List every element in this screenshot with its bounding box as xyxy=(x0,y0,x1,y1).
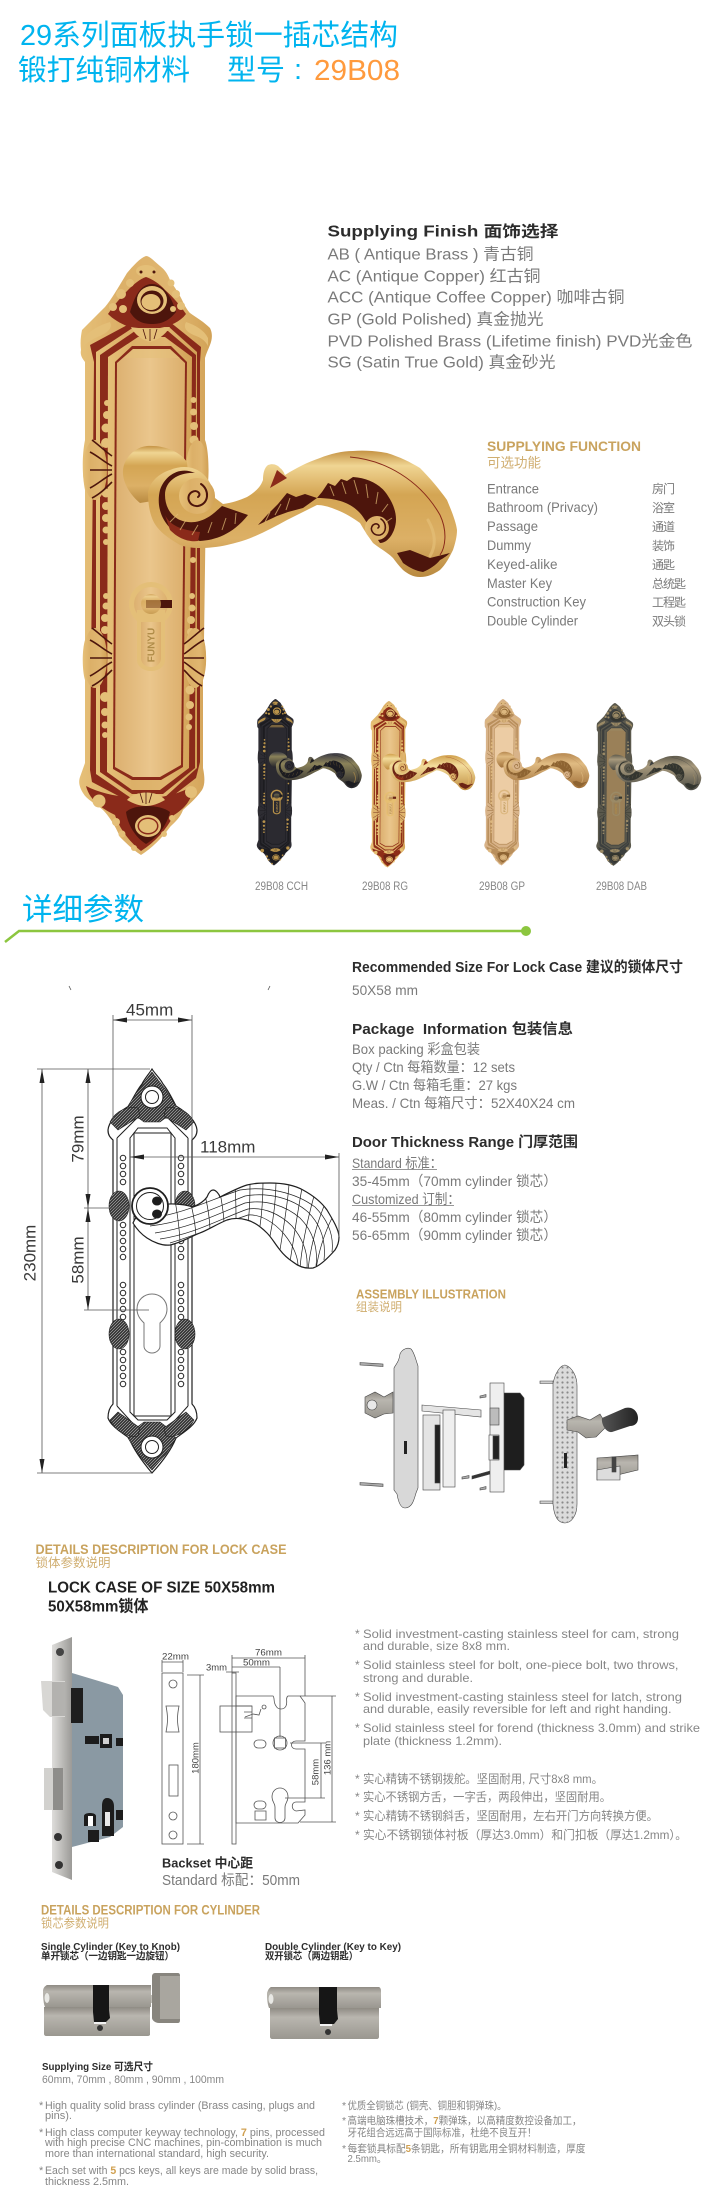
panel: door thickness range: Customized 订制： xyxy=(352,1191,460,1207)
lock drawing dimension labels: 76mm xyxy=(255,1648,282,1658)
panel: supplying finish: AB ( Antique Brass ) 青古铜 xyxy=(328,246,534,264)
panel: supplying function: 装饰 xyxy=(652,539,675,553)
panel: door thickness range: Door Thickness Range 门厚范围 xyxy=(352,1133,578,1151)
bead chains xyxy=(123,1158,181,1385)
lock case bullets chinese: 实心不锈钢方舌，一字舌，两段伸出，坚固耐用。 xyxy=(363,1789,611,1804)
right lever xyxy=(567,1408,638,1438)
main door handle photo xyxy=(79,256,457,855)
title: 29系列面板执手锁一插芯结构 xyxy=(20,19,398,52)
lock case bullets chinese: * xyxy=(355,1809,360,1823)
lock case bullets chinese xyxy=(355,1771,687,1842)
lock case bullets chinese: 实心精铸不锈钢拨舵。坚固耐用, 尺寸8x8 mm。 xyxy=(363,1771,603,1786)
lock drawing dimension labels: 136 mm xyxy=(322,1741,334,1775)
lock drawing dimension labels: 58mm xyxy=(310,1759,322,1785)
panel: recommended size: 50X58 mm xyxy=(352,982,418,998)
heading: cylinder details: DETAILS DESCRIPTION FOR CYLINDER xyxy=(41,1902,260,1918)
single cylinder caption xyxy=(41,1941,180,1962)
right plate xyxy=(540,1365,577,1523)
lock drawing dimension labels: 50mm xyxy=(243,1658,270,1668)
finish thumbnail labels: 29B08 DAB xyxy=(596,881,647,893)
plate inner lines xyxy=(117,1118,188,1428)
lock case bullets english xyxy=(355,1627,700,1748)
heading: lock case details: DETAILS DESCRIPTION FOR LOCK CASE xyxy=(36,1542,286,1557)
finish thumbnail: GP xyxy=(484,699,589,866)
dimension drawing of handle xyxy=(37,986,339,1473)
double cylinder caption: Double Cylinder (Key to Key) xyxy=(265,1941,401,1953)
panel: supplying function: 总统匙 xyxy=(652,577,686,591)
cylinder bullets chinese: 2.5mm。 xyxy=(348,2153,386,2165)
lock case title: LOCK CASE OF SIZE 50X58mm xyxy=(48,1580,275,1596)
panel: supplying function: 通道 xyxy=(652,520,675,534)
panel: door thickness range: Standard 标准： xyxy=(352,1155,442,1171)
finish thumbnail: RG xyxy=(370,701,475,868)
panel: package information: Meas. / Ctn 每箱尺寸：52X40X24 cm xyxy=(352,1095,575,1111)
lock case bullets chinese: * xyxy=(355,1772,360,1786)
panel: supplying finish: SG (Satin True Gold) 真金砂光 xyxy=(328,354,556,372)
cylinder bullets chinese: 每套锁具标配5条钥匙，所有钥匙用全铜材料制造，厚度 xyxy=(348,2142,586,2155)
lock case photo xyxy=(41,1637,123,1880)
cylinder bullets english xyxy=(39,2100,325,2188)
panel: package information: Package Information 包装信息 xyxy=(352,1020,573,1038)
dimension labels xyxy=(20,1000,255,1284)
top crown xyxy=(110,1072,194,1130)
panel: supplying finish xyxy=(328,222,692,372)
cylinder bullets english: more than international standard, high security. xyxy=(45,2148,269,2160)
double cylinder caption xyxy=(265,1941,401,1962)
supplying size: Supplying Size 可选尺寸 xyxy=(42,2060,153,2073)
cylinder bullets english: * xyxy=(39,2127,44,2139)
backset text: Backset 中心距 xyxy=(162,1856,253,1870)
bottom crown xyxy=(110,1412,194,1470)
finish thumbnail labels xyxy=(255,881,647,893)
single cylinder caption: 单开锁芯（一边钥匙一边旋钮） xyxy=(41,1950,174,1962)
lock case bullets english: plate (thickness 1.2mm). xyxy=(363,1734,502,1748)
lock drawing dimension labels: 3mm xyxy=(206,1662,227,1674)
panel: supplying function: SUPPLYING FUNCTION xyxy=(487,438,641,454)
panel: supplying function: Construction Key xyxy=(487,594,586,610)
dimension labels: 230mm xyxy=(20,1225,40,1281)
heading: cylinder details: 锁芯参数说明 xyxy=(41,1916,109,1930)
title xyxy=(18,19,400,87)
panel: supplying function: Passage xyxy=(487,518,538,534)
panel: door thickness range: 46-55mm（80mm cylinder 锁芯） xyxy=(352,1209,557,1225)
supplying size: 60mm, 70mm , 80mm , 90mm , 100mm xyxy=(42,2074,224,2086)
left plate xyxy=(394,1348,418,1508)
lock case bullets english: Solid investment-casting stainless steel for latch, strong xyxy=(363,1690,682,1704)
side ornaments xyxy=(109,1191,195,1349)
backset text: Standard 标配：50mm xyxy=(162,1872,300,1889)
panel: supplying finish: ACC (Antique Coffee Copper) 咖啡古铜 xyxy=(328,288,624,306)
panel: supplying function: 工程匙 xyxy=(652,594,686,610)
panel: supplying finish: GP (Gold Polished) 真金抛光 xyxy=(328,310,544,328)
heading: assembly illustration: ASSEMBLY ILLUSTRATION xyxy=(356,1286,506,1302)
panel: door thickness range: 56-65mm（90mm cylinder 锁芯） xyxy=(352,1227,557,1243)
dimension labels: 45mm xyxy=(126,1000,173,1020)
title: 29B08 xyxy=(314,55,400,87)
rose circle xyxy=(132,1188,168,1224)
screws xyxy=(360,1362,486,1490)
supplying size xyxy=(42,2060,224,2086)
lock case bullets english: and durable, easily reversible for left and right handing. xyxy=(363,1702,672,1716)
lock case bullets english: * xyxy=(355,1690,360,1704)
cylinder bullets english: thickness 2.5mm. xyxy=(45,2176,129,2188)
panel: supplying function: Entrance xyxy=(487,480,539,496)
heading: cylinder details xyxy=(41,1902,260,1930)
dimension labels: 58mm xyxy=(68,1236,88,1284)
panel: package information: G.W / Ctn 每箱毛重：27 kgs xyxy=(352,1077,517,1093)
lock case title xyxy=(48,1580,275,1616)
lock case bullets chinese: * xyxy=(355,1790,360,1804)
assembly exploded diagram xyxy=(360,1348,638,1523)
lock case bullets chinese: * xyxy=(355,1828,360,1842)
cylinder bullets english: High class computer keyway technology, 7 pins, processed xyxy=(45,2127,325,2139)
heading: assembly illustration: 组装说明 xyxy=(356,1299,402,1314)
lock case bullets english: * xyxy=(355,1627,360,1641)
panel: supplying function: 浴室 xyxy=(652,500,675,515)
double cylinder caption: 双开锁芯（两边钥匙） xyxy=(265,1950,358,1962)
cylinder bullets chinese: * xyxy=(342,2100,346,2112)
panel: supplying function: 双头锁 xyxy=(652,614,686,628)
panel: supplying function: Bathroom (Privacy) xyxy=(487,499,598,515)
lock drawing dimension labels xyxy=(162,1648,334,1785)
plate outline xyxy=(108,1069,197,1473)
lock case xyxy=(489,1383,524,1492)
cylinder bullets english: pins). xyxy=(45,2110,72,2122)
cylinder part xyxy=(597,1455,638,1480)
panel: supplying finish: PVD Polished Brass (Lifetime finish) PVD光金色 xyxy=(328,332,692,350)
cylinder bullets chinese: * xyxy=(342,2143,346,2155)
panel: package information xyxy=(352,1020,575,1111)
panel: supplying function: Double Cylinder xyxy=(487,612,578,628)
single cylinder photo xyxy=(43,1973,180,2036)
lock case bullets english: * xyxy=(355,1658,360,1672)
lock case bullets chinese: 实心精铸不锈钢斜舌，坚固耐用，左右开门方向转换方便。 xyxy=(363,1808,658,1823)
panel: supplying function: Dummy xyxy=(487,537,531,553)
panel: supplying function: 房门 xyxy=(652,481,675,496)
strike plate drawing xyxy=(162,1660,204,1844)
heading: lock case details xyxy=(36,1542,286,1570)
panel: supplying finish: Supplying Finish 面饰选择 xyxy=(328,222,559,240)
title: 锻打纯铜材料 xyxy=(18,54,190,87)
finish thumbnail: CCH xyxy=(257,699,362,866)
panel: recommended size: Recommended Size For Lock Case 建议的锁体尺寸 xyxy=(352,958,683,976)
dimension labels: 118mm xyxy=(200,1138,255,1156)
finish thumbnail labels: 29B08 GP xyxy=(479,881,525,893)
cylinder bullets chinese xyxy=(342,2099,586,2165)
panel: recommended size xyxy=(352,958,683,998)
panel: package information: Qty / Ctn 每箱数量：12 sets xyxy=(352,1059,515,1075)
backset text xyxy=(162,1856,300,1889)
cylinder bullets chinese: * xyxy=(342,2115,346,2127)
heading: lock case details: 锁体参数说明 xyxy=(36,1555,110,1570)
lock body drawing xyxy=(220,1655,336,1844)
cylinder bullets chinese: 优质全铜锁芯 (铜壳、铜胆和铜弹珠)。 xyxy=(348,2099,506,2112)
green divider line xyxy=(5,926,531,942)
section heading: details: 详细参数 xyxy=(22,893,144,927)
panel: supplying function: 可选功能 xyxy=(487,456,541,470)
finish thumbnail labels: 29B08 CCH xyxy=(255,881,308,893)
lock case title: 50X58mm锁体 xyxy=(48,1596,148,1616)
panel: supplying function: Keyed-alike xyxy=(487,556,558,572)
panel: supplying finish: AC (Antique Copper) 红古铜 xyxy=(328,268,540,286)
cylinder bullets english: * xyxy=(39,2165,44,2177)
lock case bullets english: * xyxy=(355,1721,360,1735)
finish thumbnail: DAB xyxy=(596,703,701,866)
double cylinder photo xyxy=(267,1987,381,2039)
lock case bullets english: Solid investment-casting stainless steel for cam, strong xyxy=(363,1627,679,1641)
lock drawing dimension labels: 22mm xyxy=(162,1652,189,1662)
panel: package information: Box packing 彩盒包装 xyxy=(352,1041,480,1057)
cylinder bullets english: * xyxy=(39,2100,44,2112)
finish thumbnail labels: 29B08 RG xyxy=(362,881,408,893)
cylinder bullets chinese: 高端电脑珠槽技术，7颗弹珠，以高精度数控设备加工， xyxy=(348,2114,582,2127)
heading: assembly illustration xyxy=(356,1286,506,1314)
panel: supplying function xyxy=(487,438,686,628)
lock drawing dimension labels: 180mm xyxy=(190,1742,202,1774)
lever mesh xyxy=(133,1180,339,1270)
left knob xyxy=(365,1392,393,1418)
cylinder bullets chinese: 牙花组合远远高于国际标准，杜绝不良互开！ xyxy=(348,2126,536,2139)
panel: door thickness range xyxy=(352,1133,578,1243)
lock case bullets english: and durable, size 8x8 mm. xyxy=(363,1639,510,1653)
lock case bullets english: strong and durable. xyxy=(363,1671,473,1685)
lock case bullets english: Solid stainless steel for bolt, one-piece bolt, two throws, xyxy=(363,1658,678,1672)
strike and bar xyxy=(422,1405,481,1490)
cylinder bullets english: High quality solid brass cylinder (Brass casing, plugs and xyxy=(45,2100,315,2112)
dimension lines xyxy=(37,986,339,1473)
keyhole xyxy=(137,1294,167,1353)
cylinder bullets english: with high precise CNC machines, pin-combination is much xyxy=(44,2137,322,2149)
lock case bullets english: Solid stainless steel for forend (thickness 3.0mm) and strike xyxy=(363,1721,700,1735)
title: 型号 xyxy=(227,54,285,87)
panel: supplying function: Master Key xyxy=(487,575,552,591)
lock case bullets chinese: 实心不锈钢锁体衬板（厚达3.0mm）和门扣板（厚达1.2mm）。 xyxy=(363,1827,687,1842)
single cylinder caption: Single Cylinder (Key to Knob) xyxy=(41,1941,180,1953)
panel: supplying function: 通匙 xyxy=(652,558,675,572)
cylinder bullets english: Each set with 5 pcs keys, all keys are made by solid brass, xyxy=(45,2165,318,2177)
panel: door thickness range: 35-45mm（70mm cylinder 锁芯） xyxy=(352,1173,557,1189)
title: : xyxy=(294,54,302,86)
dimension labels: 79mm xyxy=(68,1115,88,1163)
